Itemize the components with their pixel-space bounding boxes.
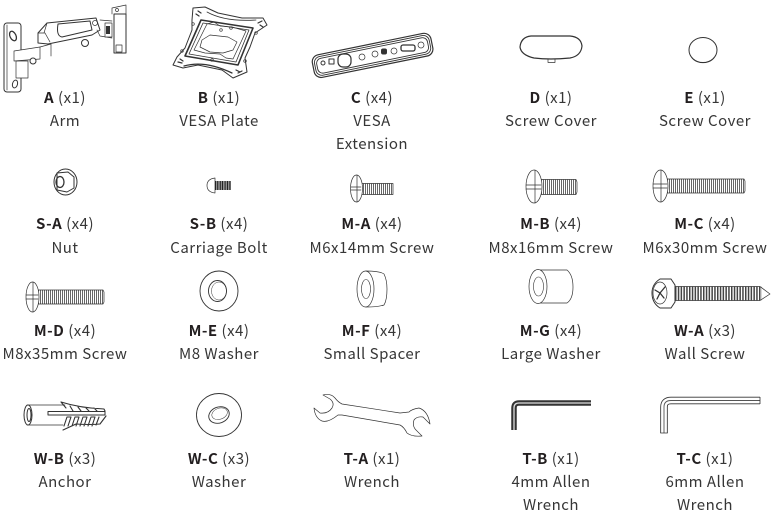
label: M-E — [179, 320, 259, 364]
item W-B: anchor — [24, 402, 106, 492]
icon: M8 washer — [200, 271, 238, 311]
label: T-C — [665, 448, 745, 515]
label: D — [505, 87, 597, 131]
icon: M8x16mm screw — [526, 170, 577, 203]
label: C: VESA — [353, 110, 391, 131]
icon: M8x35mm screw — [26, 282, 104, 312]
item T-B: 4mm Allen wrench — [511, 403, 591, 515]
label: E — [659, 87, 751, 131]
item M-B: screw — [489, 170, 613, 258]
item S-A: nut — [36, 169, 94, 258]
label: M-A: M-A (x4) — [341, 213, 403, 234]
icon: M6x30mm screw — [653, 170, 745, 202]
label: B: VESA Plate — [179, 110, 259, 131]
icon: anchor — [24, 402, 106, 430]
label: W-A: W-A (x3) — [674, 320, 736, 341]
label: M-C: M-C (x4) — [674, 213, 736, 234]
icon: small spacer — [357, 271, 387, 307]
label: T-A: T-A (x1) — [344, 448, 400, 469]
label: T-B: T-B (x1) — [522, 448, 580, 469]
label: S-B: S-B (x4) — [190, 213, 248, 234]
icon: 4mm Allen wrench — [514, 403, 591, 430]
label: M-B: M8x16mm Screw — [489, 237, 613, 258]
label: T-A: Wrench — [344, 471, 400, 492]
label: T-C: Wrench — [677, 494, 733, 515]
item T-A: wrench — [314, 394, 430, 492]
label: S-A — [36, 213, 94, 258]
label: E: Screw Cover — [659, 110, 751, 131]
item M-F: spacer — [323, 271, 421, 364]
label: T-C: 6mm Allen — [665, 471, 745, 492]
icon: M6x14mm screw — [350, 175, 393, 202]
item M-G: large washer — [501, 270, 601, 364]
label: W-B — [34, 448, 96, 492]
label: M-F — [323, 320, 421, 364]
label: C — [336, 87, 408, 154]
item M-C: screw — [643, 170, 767, 258]
icon: arm — [4, 5, 126, 92]
label: M-G: M-G (x4) — [520, 320, 582, 341]
label: C: C (x4) — [351, 87, 393, 108]
label: T-A — [344, 448, 400, 492]
label: A: Arm — [50, 110, 80, 131]
label: M-G: Large Washer — [501, 343, 601, 364]
icon: VESA extension — [311, 32, 434, 79]
icon: carriage bolt — [207, 178, 231, 193]
item W-C: washer — [188, 394, 250, 492]
label: M-A: M6x14mm Screw — [310, 237, 434, 258]
label: W-C: Washer — [192, 471, 246, 492]
label: M-C: M6x30mm Screw — [643, 237, 767, 258]
label: A — [43, 87, 86, 131]
label: M-G — [501, 320, 601, 364]
item E: screw cover — [659, 38, 751, 131]
label: B — [179, 87, 259, 131]
label: W-B: Anchor — [39, 471, 91, 492]
label: M-B — [489, 213, 613, 258]
icon: 6mm Allen wrench — [660, 397, 760, 433]
label: B: B (x1) — [198, 87, 240, 108]
label: S-B: Carriage Bolt — [170, 237, 268, 258]
label: M-A — [310, 213, 434, 258]
label: T-B: 4mm Allen — [511, 471, 591, 492]
icon: wall screw — [652, 279, 770, 308]
label: T-B — [511, 448, 591, 515]
label: M-D: M-D (x4) — [34, 320, 96, 341]
label: M-C — [643, 213, 767, 258]
label: C: Extension — [336, 133, 408, 154]
label: E: E (x1) — [684, 87, 726, 108]
icon: VESA plate — [173, 7, 267, 78]
label: W-A — [665, 320, 745, 364]
label: M-E: M-E (x4) — [189, 320, 249, 341]
item C: VESA extension — [311, 32, 434, 154]
icon: nut — [54, 169, 77, 195]
icon: wrench — [314, 394, 430, 436]
item A: arm — [4, 5, 126, 131]
label: T-B: Wrench — [523, 494, 579, 515]
item B: VESA plate — [173, 7, 267, 131]
label: S-B — [170, 213, 268, 258]
item M-D: screw — [3, 282, 127, 364]
icon: oval screw cover — [520, 36, 582, 62]
label: S-A: Nut — [51, 237, 79, 258]
item W-A: wall screw — [652, 279, 770, 364]
icon: large washer — [529, 270, 573, 304]
icon: round screw cover — [689, 38, 717, 62]
label: A: A (x1) — [43, 87, 86, 108]
label: W-C: W-C (x3) — [188, 448, 250, 469]
item S-B: carriage bolt — [170, 178, 268, 258]
label: M-F: Small Spacer — [323, 343, 421, 364]
label: M-B: M-B (x4) — [520, 213, 582, 234]
label: W-B: W-B (x3) — [34, 448, 96, 469]
item T-C: 6mm Allen wrench — [660, 397, 760, 515]
label: D: Screw Cover — [505, 110, 597, 131]
label: W-A: Wall Screw — [665, 343, 745, 364]
label: S-A: S-A (x4) — [36, 213, 94, 234]
label: M-D — [3, 320, 127, 364]
label: M-D: M8x35mm Screw — [3, 343, 127, 364]
label: M-F: M-F (x4) — [342, 320, 402, 341]
label: W-C — [188, 448, 250, 492]
item D: screw cover — [505, 36, 597, 131]
label: T-C: T-C (x1) — [677, 448, 733, 469]
item M-E: washer — [179, 271, 259, 364]
icon: washer — [196, 394, 242, 436]
label: D: D (x1) — [529, 87, 573, 108]
item M-A: screw — [310, 175, 434, 258]
label: M-E: M8 Washer — [179, 343, 259, 364]
